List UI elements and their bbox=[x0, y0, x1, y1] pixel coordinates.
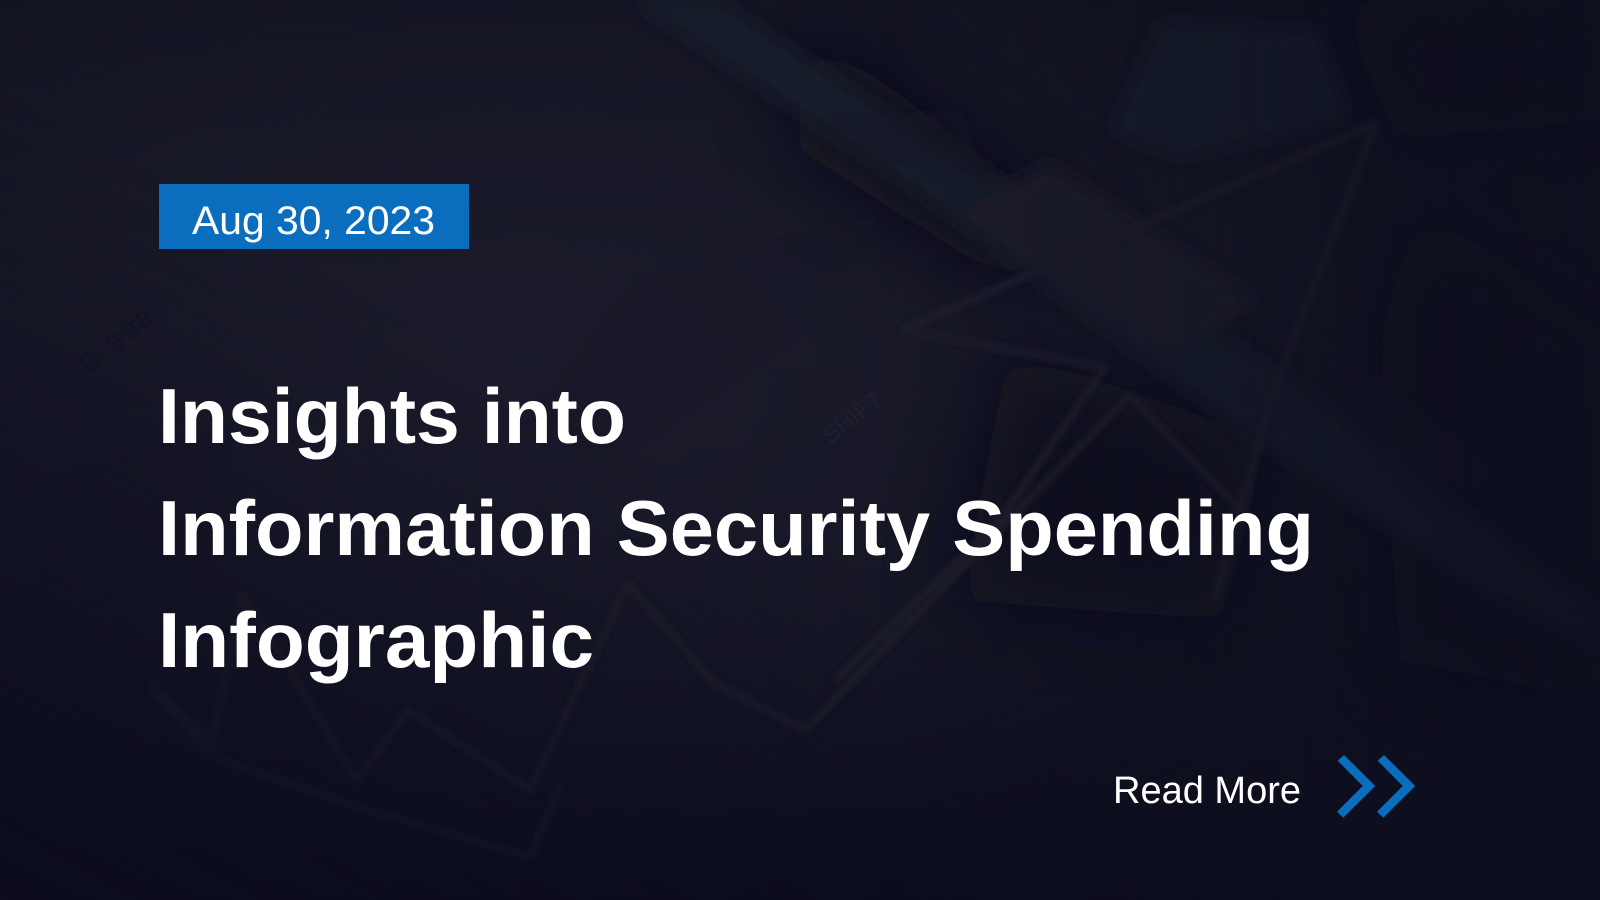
title: Insights into bbox=[158, 372, 626, 460]
date badge: Aug 30, 2023 bbox=[192, 199, 435, 243]
icon: double chevron arrow bbox=[1337, 755, 1415, 818]
title bbox=[158, 372, 1314, 684]
background: dark bill shadows bbox=[800, 0, 1600, 700]
title: Information Security Spending bbox=[158, 484, 1314, 572]
read more link: Read More bbox=[1113, 770, 1301, 812]
title: Infographic bbox=[158, 596, 594, 684]
background: light banknote bands bbox=[630, 0, 1600, 650]
background: keyboard shift key: SHIFT bbox=[817, 386, 889, 450]
background: rising arrow lines bbox=[148, 123, 1376, 857]
background: banknote serial and key lettering bbox=[60, 301, 1366, 415]
background: banknote serial and key lettering: DOLLAR bbox=[1221, 308, 1366, 415]
read more link bbox=[1113, 755, 1415, 818]
background: banknote serial and key lettering: JD 898 bbox=[60, 301, 163, 390]
background: banknote engraving texture bbox=[40, 110, 1500, 620]
date badge bbox=[159, 184, 469, 249]
